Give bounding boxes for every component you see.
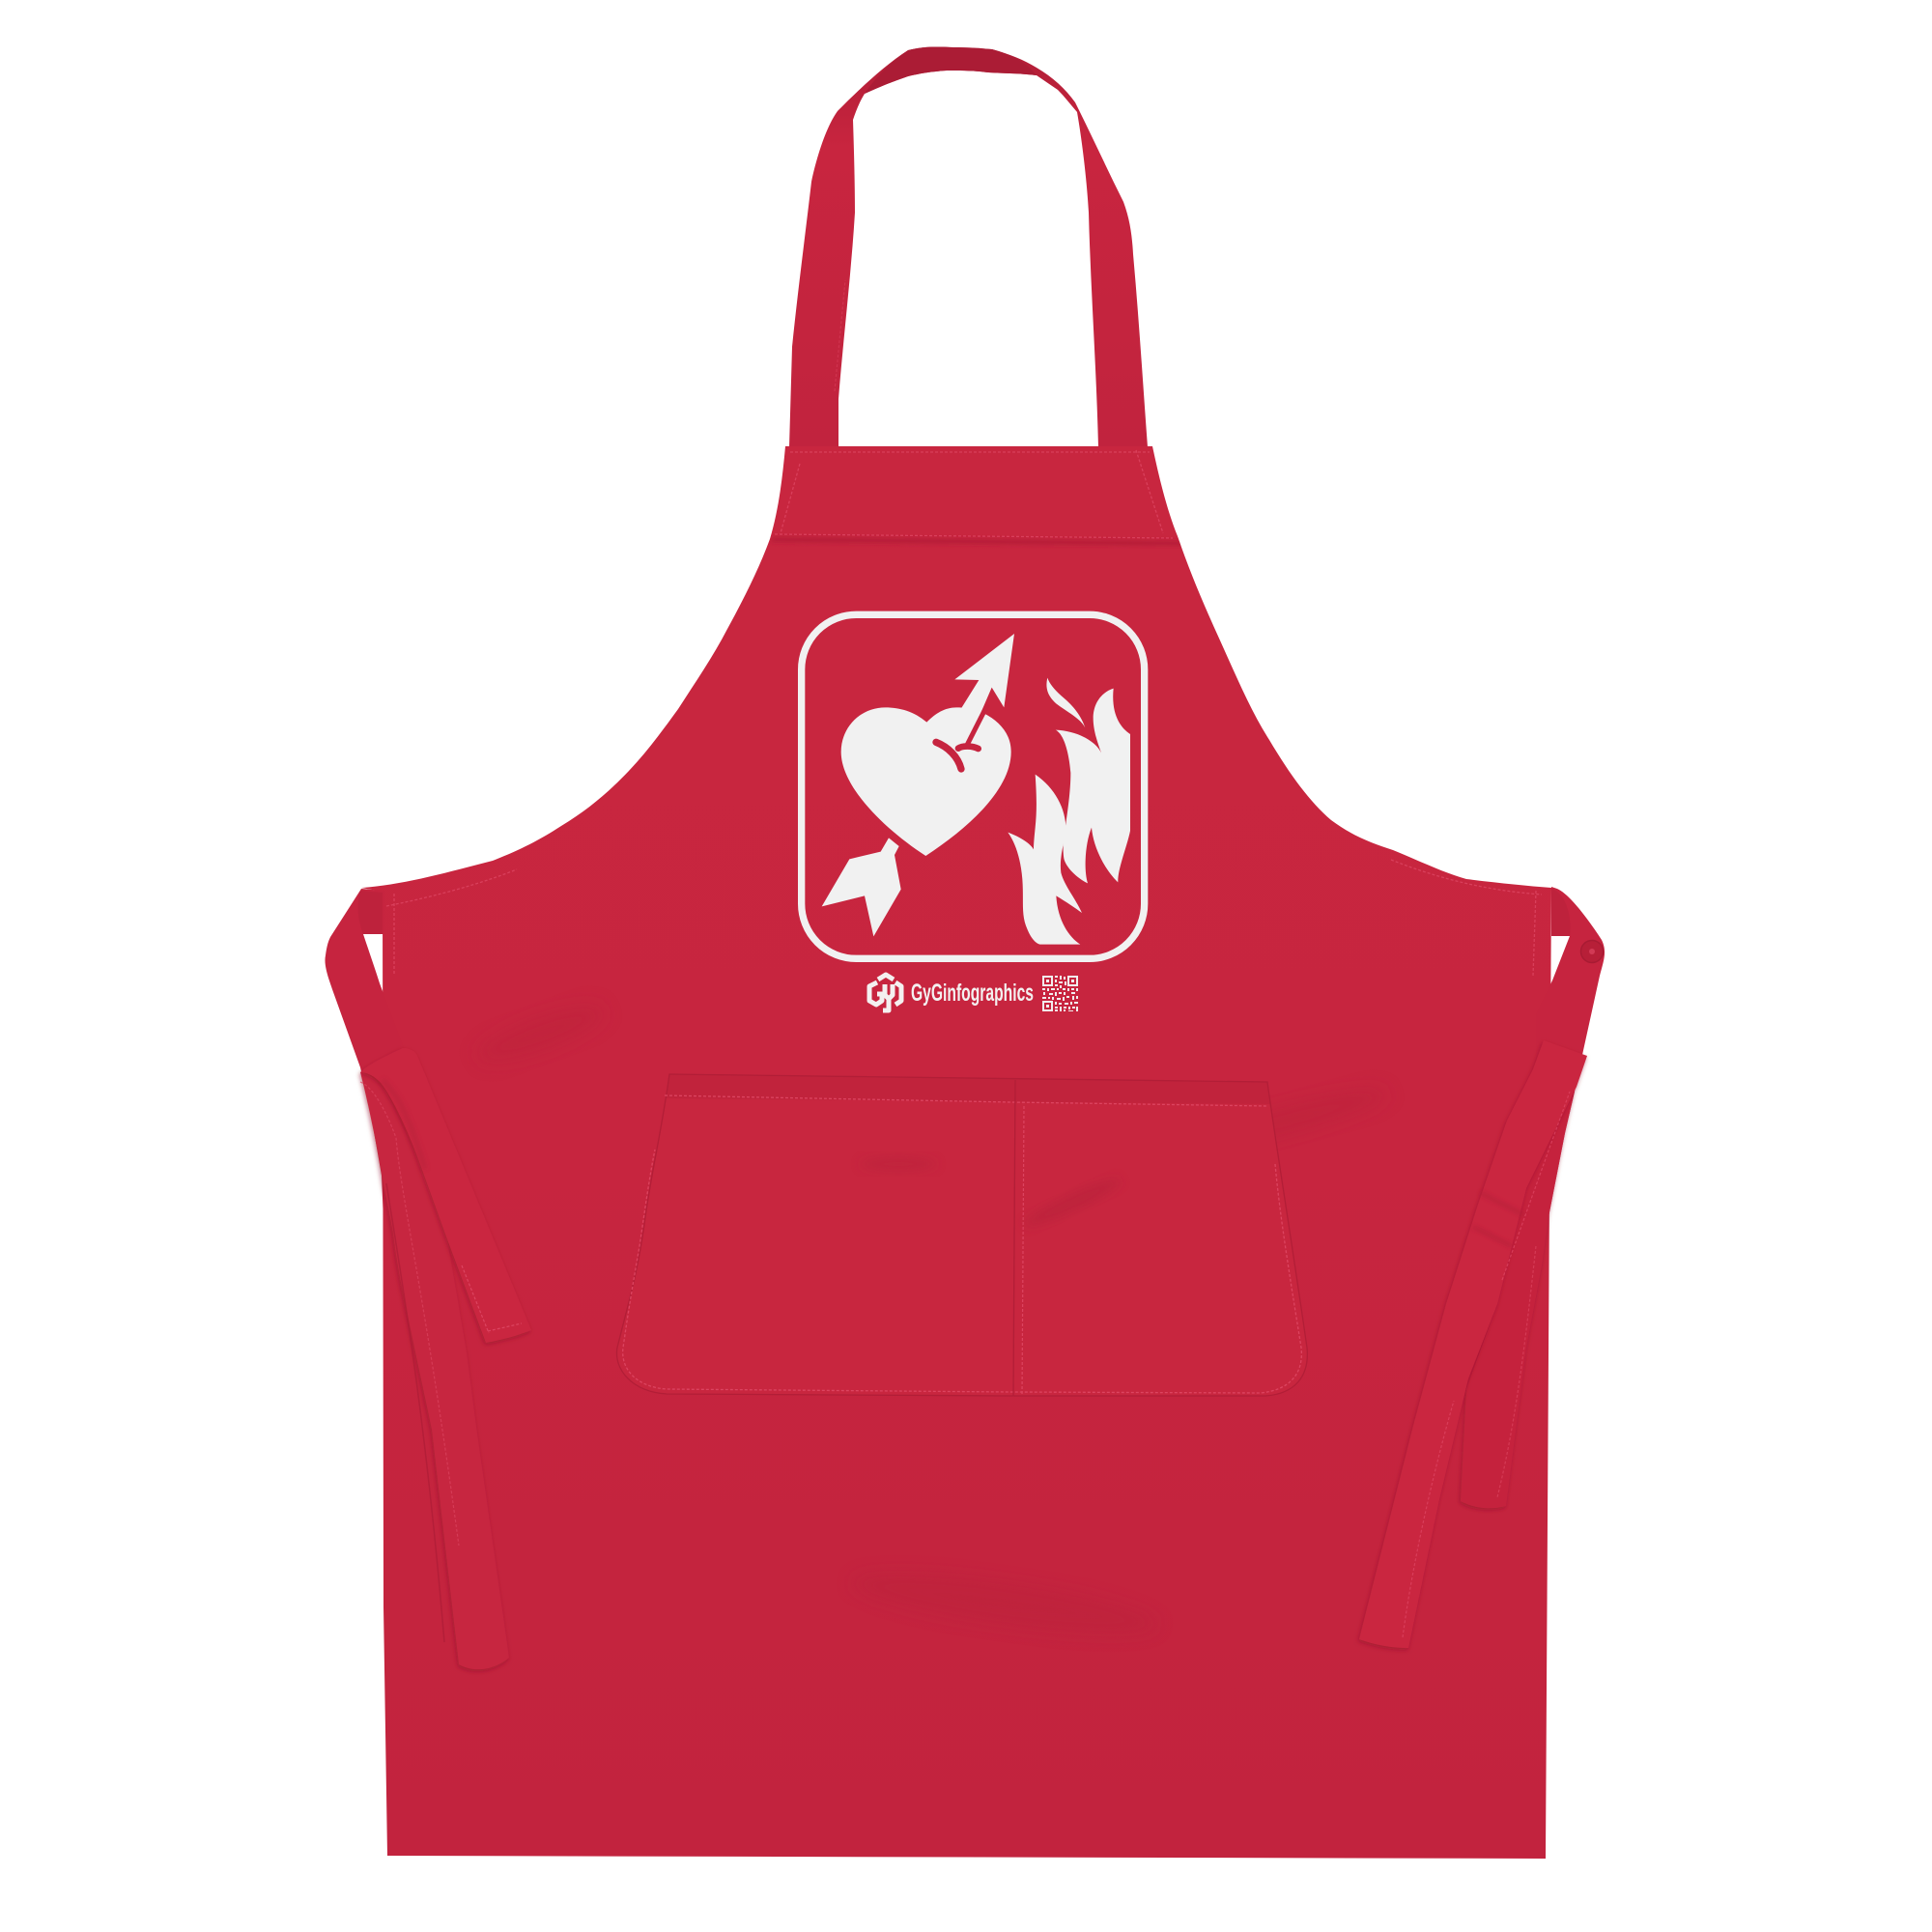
icon: flames xyxy=(1008,678,1130,945)
apron illustration xyxy=(325,46,1605,1859)
left long hanging tie xyxy=(360,1072,509,1669)
icon: arrow head and shaft xyxy=(954,634,1014,749)
apron body xyxy=(361,446,1551,1859)
right lower short tab xyxy=(1461,1092,1575,1508)
QR code xyxy=(1042,976,1078,1011)
left short tie tab xyxy=(360,1048,531,1343)
left strap loop xyxy=(325,889,406,1220)
logo mark xyxy=(869,975,901,1010)
neck strap xyxy=(789,46,1148,447)
body stitching xyxy=(386,450,1542,976)
icon: heart xyxy=(841,707,1011,856)
icon: arrow fletching xyxy=(822,838,901,936)
right strap loop xyxy=(1536,887,1605,1217)
icon frame xyxy=(802,614,1145,958)
arrow entry cut xyxy=(936,704,987,769)
pocket xyxy=(616,1074,1307,1396)
button xyxy=(1580,941,1604,962)
right long tie xyxy=(1359,1040,1587,1648)
brand name: GyGinfographics xyxy=(911,980,1034,1007)
fabric folds and bib seam xyxy=(471,537,1391,1646)
printed icon: heart, arrow and flames xyxy=(802,614,1145,958)
